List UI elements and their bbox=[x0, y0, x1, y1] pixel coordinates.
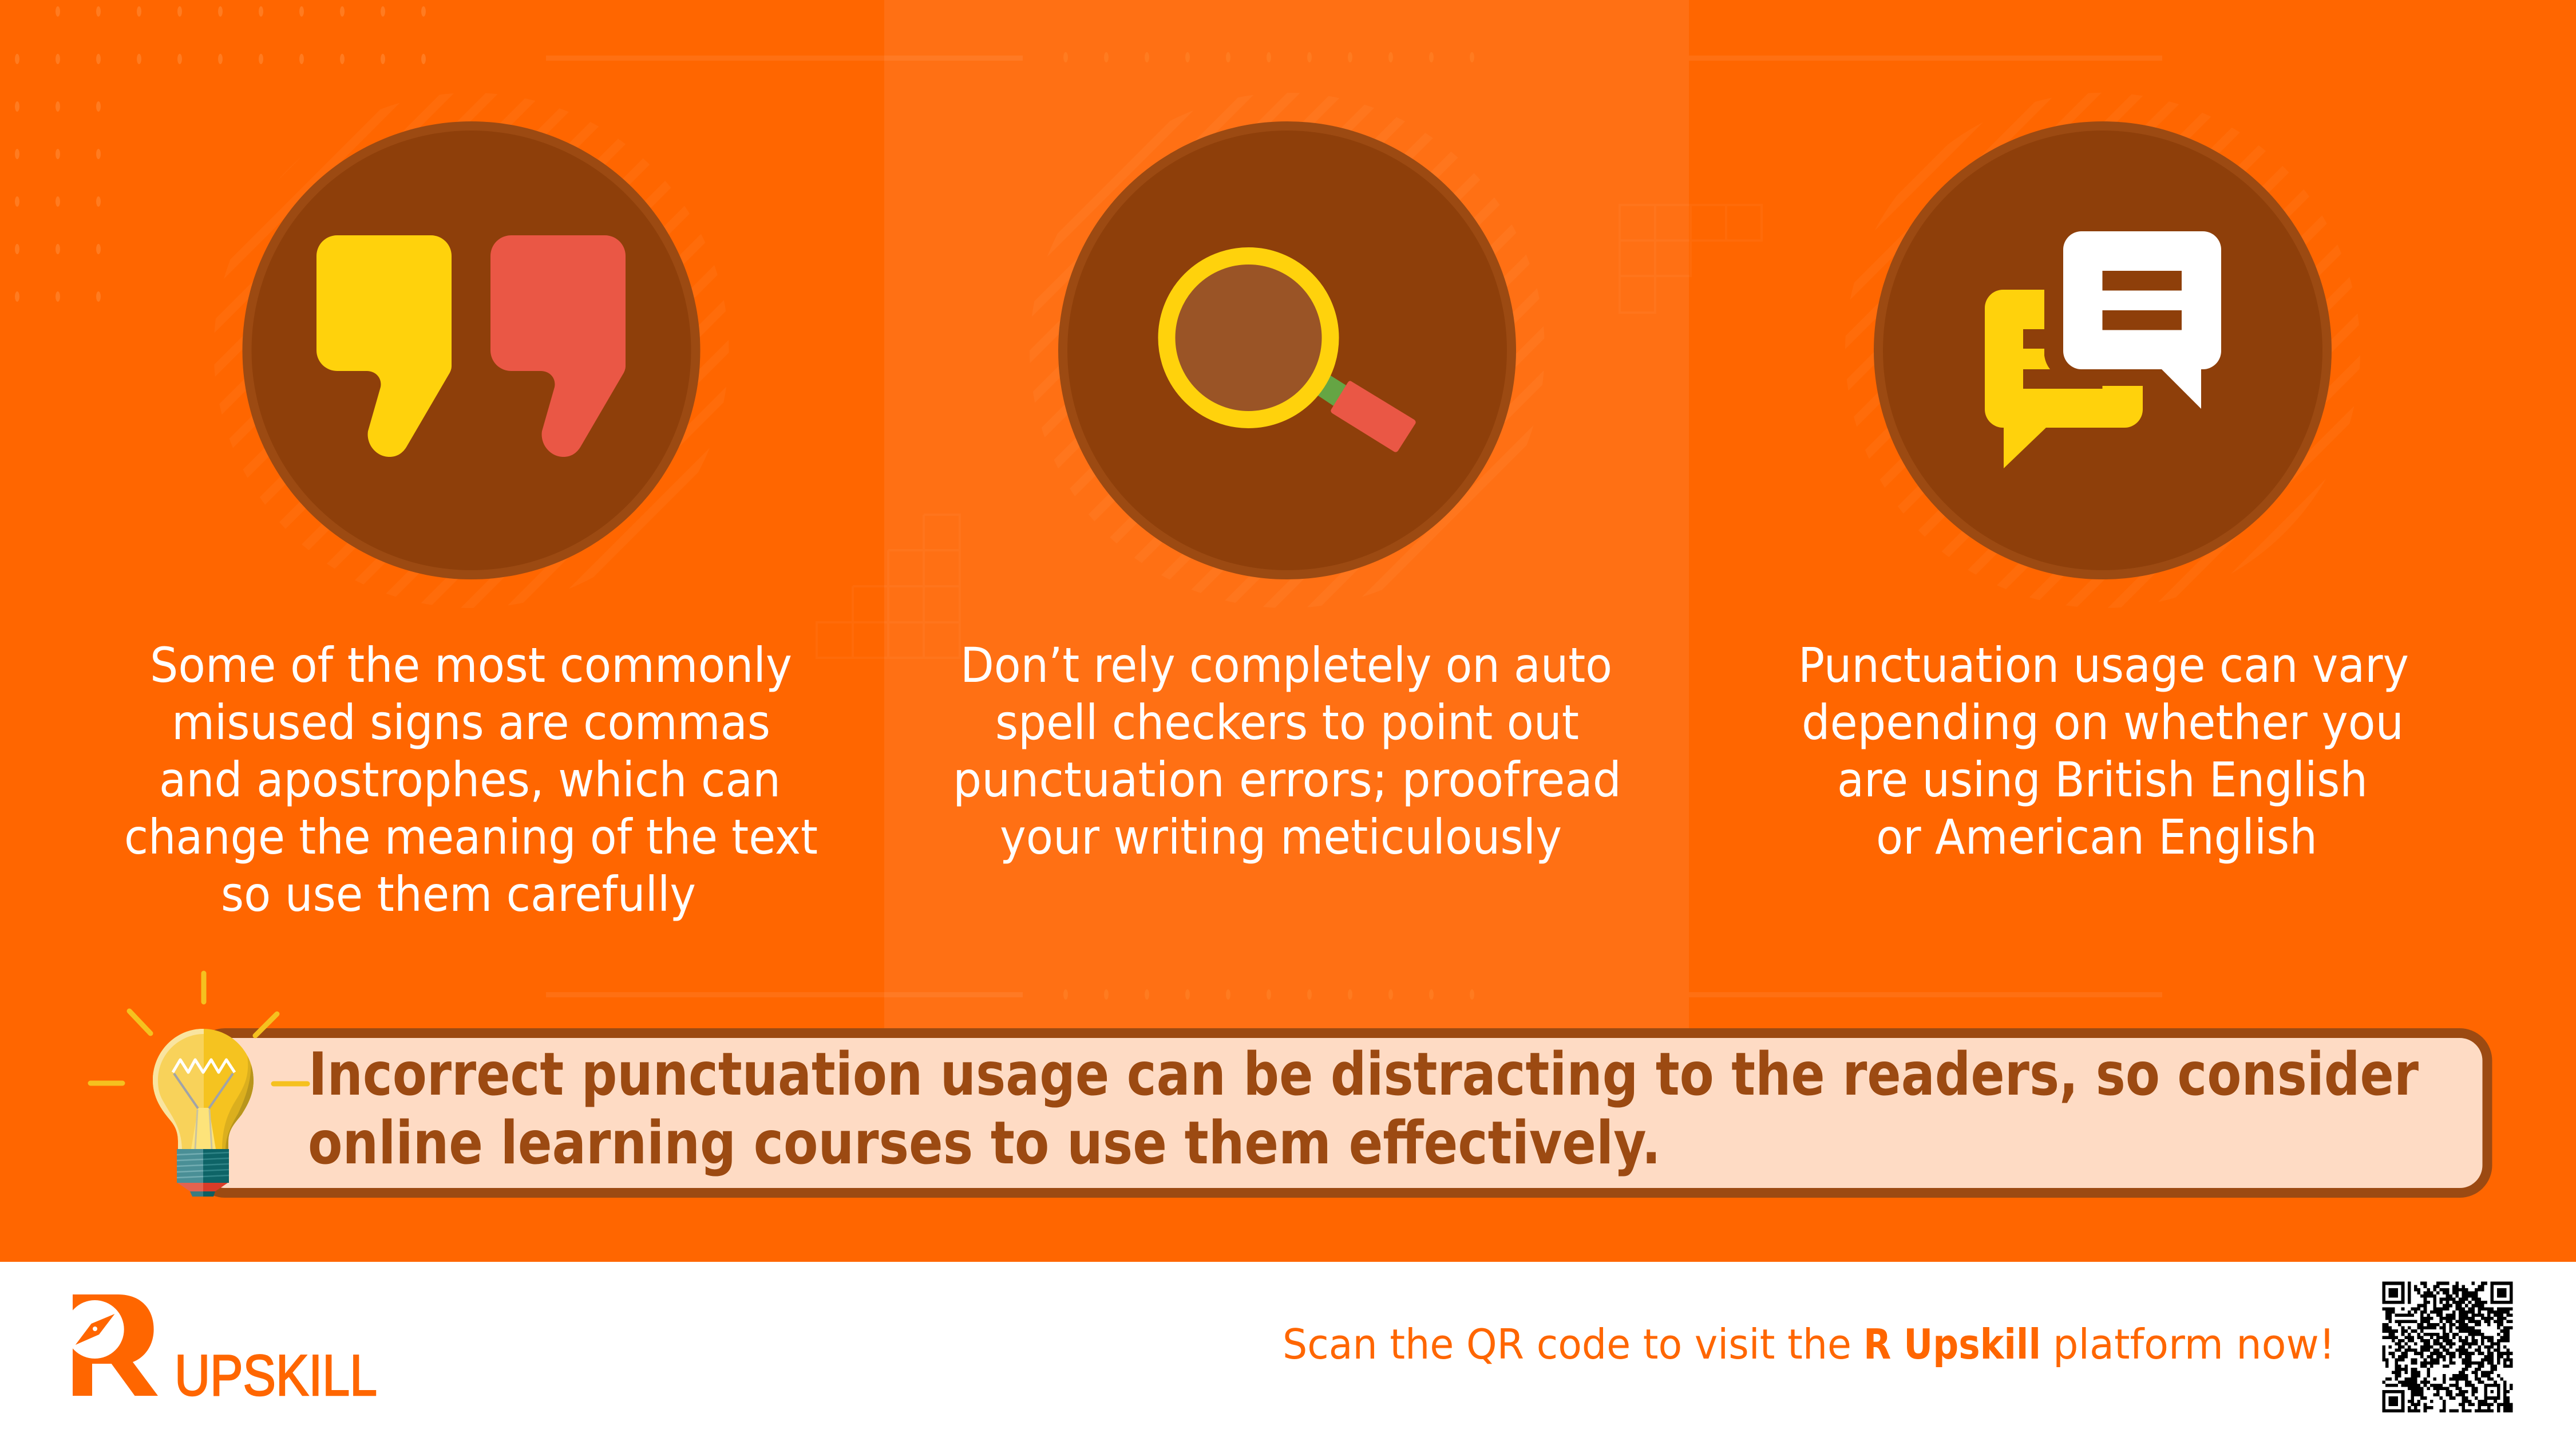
text: British vs American usage: Punctuation usage can vary bbox=[1798, 637, 2409, 693]
panel: commonly misused signs bbox=[124, 121, 818, 922]
icon: magnifying glass bbox=[1058, 121, 1516, 579]
text: British vs American usage: depending on whether you bbox=[1802, 694, 2404, 751]
text: callout message bbox=[308, 1040, 2419, 1178]
panel: British vs American usage bbox=[1798, 121, 2409, 865]
text: commonly misused signs: so use them carefully bbox=[221, 866, 696, 922]
footer bbox=[0, 1262, 2576, 1429]
text: British vs American usage: or American English bbox=[1876, 809, 2317, 865]
text: proofread your writing: spell checkers to point out bbox=[995, 694, 1579, 751]
text: commonly misused signs: and apostrophes, which can bbox=[159, 752, 781, 808]
callout banner bbox=[90, 973, 2487, 1197]
icon: quotation marks bbox=[243, 121, 701, 579]
text: commonly misused signs: misused signs are commas bbox=[172, 694, 770, 751]
text: QR call to action: platform now! bbox=[2053, 1320, 2335, 1368]
text: proofread your writing: punctuation errors; proofread bbox=[953, 752, 1621, 808]
text: commonly misused signs: change the meaning of the text bbox=[124, 809, 818, 865]
logo: R Upskill bbox=[57, 1294, 377, 1408]
text: commonly misused signs bbox=[124, 637, 818, 922]
text: proofread your writing bbox=[953, 637, 1621, 865]
text: proofread your writing: Don’t rely completely on auto bbox=[960, 637, 1612, 693]
text: commonly misused signs: Some of the most commonly bbox=[150, 637, 792, 693]
panel: proofread your writing bbox=[953, 121, 1621, 865]
text: callout message: online learning courses to use them effectively. bbox=[308, 1109, 1661, 1178]
text: QR call to action bbox=[1283, 1320, 2335, 1368]
text: QR call to action: R Upskill bbox=[1863, 1320, 2041, 1368]
QR code bbox=[2382, 1283, 2513, 1411]
text: British vs American usage: are using British English bbox=[1837, 752, 2368, 808]
text: QR call to action: Scan the QR code to visit the bbox=[1283, 1320, 1851, 1368]
text: proofread your writing: your writing meticulously bbox=[1000, 809, 1562, 865]
text: British vs American usage bbox=[1798, 637, 2409, 865]
logo: R Upskill: UPSKILL bbox=[175, 1344, 377, 1408]
icon: light bulb bbox=[90, 973, 307, 1197]
icon: speech bubbles bbox=[1874, 121, 2332, 579]
